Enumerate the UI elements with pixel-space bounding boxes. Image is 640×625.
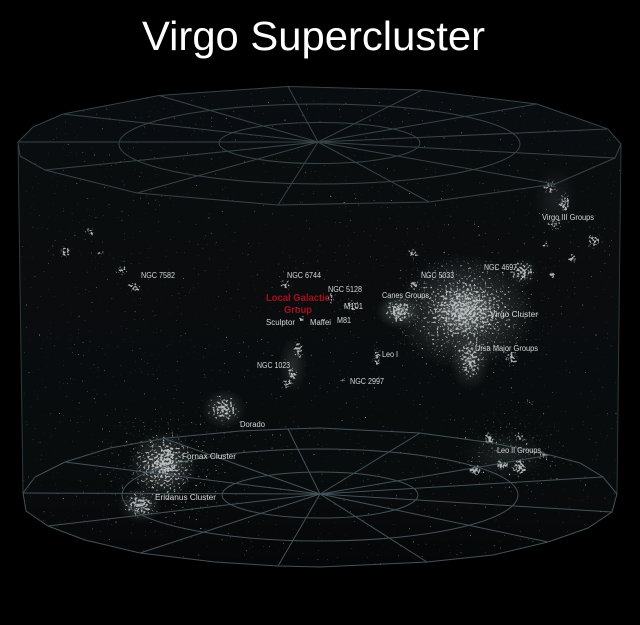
top disc grid — [18, 86, 621, 205]
label: NGC 5033: NGC 5033 — [421, 271, 454, 280]
star field — [18, 86, 621, 567]
label: NGC 5128: NGC 5128 — [328, 285, 362, 294]
cluster: Dorado — [208, 396, 240, 425]
label: Dorado: Dorado — [240, 420, 266, 429]
label: Virgo Cluster: Virgo Cluster — [490, 310, 538, 319]
label: Fornax Cluster: Fornax Cluster — [182, 452, 236, 461]
cylinder body — [18, 86, 621, 567]
cluster: Leo II halo — [448, 402, 571, 497]
cluster: Leo II — [466, 397, 550, 476]
label: NGC 2997: NGC 2997 — [350, 377, 384, 386]
cluster: Ursa Major — [456, 338, 484, 380]
label: Leo II Groups: Leo II Groups — [497, 446, 541, 455]
cluster: NGC 2997 — [338, 378, 346, 383]
label: Leo I: Leo I — [382, 350, 398, 359]
label: Sculptor: Sculptor — [266, 318, 295, 327]
label: Canes Groups: Canes Groups — [382, 291, 429, 300]
sparse field stars — [18, 86, 621, 567]
label: Maffei: Maffei — [310, 318, 331, 327]
label: NGC 7582: NGC 7582 — [141, 271, 175, 280]
cluster: Virgo core — [423, 278, 507, 342]
cluster: outer Fornax halo — [90, 398, 252, 538]
labels — [141, 213, 594, 502]
label: Eridanus Cluster: Eridanus Cluster — [155, 493, 216, 502]
bottom disc grid — [23, 428, 617, 567]
cluster: NGC 4697 — [510, 260, 536, 284]
label: Local Galactic Group: Group — [284, 305, 312, 316]
cluster: NGC 1023 — [282, 339, 303, 389]
cluster: Leo I — [372, 346, 380, 370]
cluster: Eridanus — [124, 491, 156, 520]
cluster: Fornax — [129, 431, 197, 499]
label: M101: M101 — [344, 302, 364, 311]
title: Virgo Supercluster — [142, 13, 485, 59]
label: NGC 6744: NGC 6744 — [287, 271, 321, 280]
label: NGC 1023: NGC 1023 — [257, 361, 290, 370]
label: Virgo III Groups: Virgo III Groups — [542, 213, 594, 222]
label: Ursa Major Groups: Ursa Major Groups — [475, 344, 538, 353]
label: Local Galactic Group: Local Galactic — [266, 293, 330, 304]
label: M81: M81 — [337, 316, 351, 325]
cylinder side lines — [18, 142, 621, 494]
cluster: local — [280, 280, 358, 322]
cluster: Virgo — [380, 242, 550, 382]
cluster: NGC 7582 — [60, 228, 142, 292]
cluster: Canes — [383, 298, 414, 324]
cluster: Virgo III — [539, 178, 604, 280]
label: NGC 4697: NGC 4697 — [484, 263, 517, 272]
label: Local Galactic Group — [266, 293, 330, 316]
nebula glow — [118, 166, 577, 523]
